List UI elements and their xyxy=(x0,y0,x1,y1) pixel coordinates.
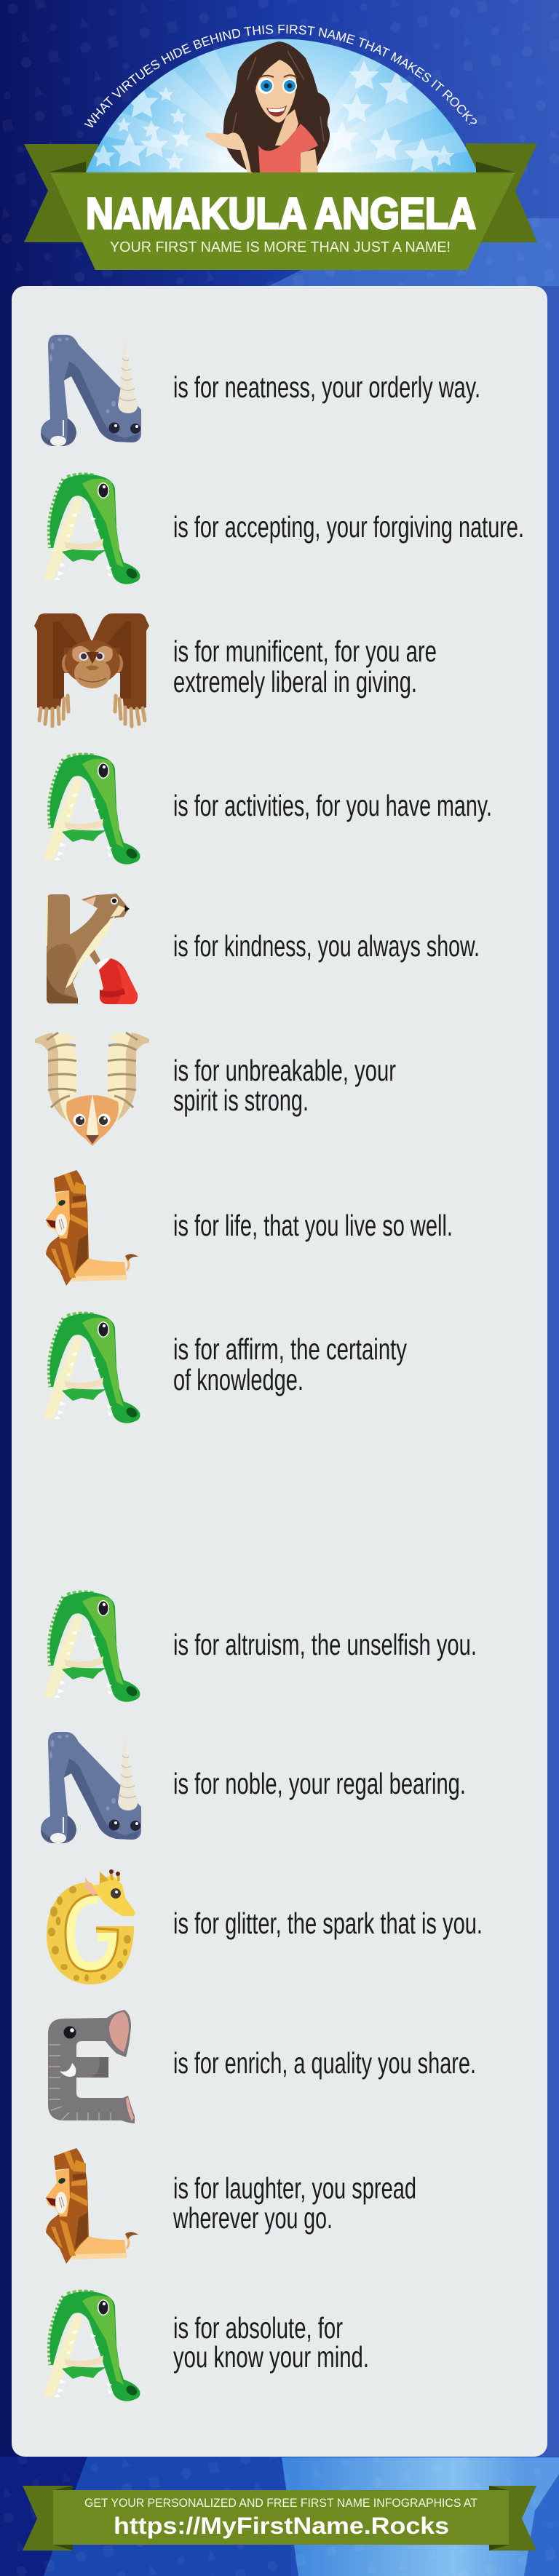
footer ribbon tails xyxy=(23,2486,536,2551)
text: A affirm lines: of knowledge. xyxy=(173,1363,304,1396)
row: G glitter xyxy=(47,1869,483,1984)
icon: crocodile letter A xyxy=(44,754,140,864)
icon: giraffe letter G xyxy=(47,1869,135,1984)
header: curved tagline: WHAT VIRTUES HIDE BEHIND THIS FIRST NAME THAT MAKES IT ROCK? xyxy=(84,25,477,128)
text: A absolute lines: is for absolute, for xyxy=(173,2311,343,2345)
row: U unbreakable xyxy=(35,1033,396,1146)
text: U lines: spirit is strong. xyxy=(173,1084,309,1117)
row: A affirm xyxy=(44,1313,407,1423)
row: A absolute xyxy=(44,2291,369,2401)
icon: crocodile letter A xyxy=(44,2291,140,2401)
icon: crocodile letter A xyxy=(44,474,140,584)
icon: narwhal letter N xyxy=(41,335,141,446)
icon: lion letter L xyxy=(46,1170,138,1286)
text: M munificent lines xyxy=(173,635,437,699)
row: N neatness xyxy=(41,335,480,446)
icon: narwhal letter N xyxy=(41,1732,141,1843)
row: E enrich xyxy=(48,2010,476,2123)
footer ribbon main panel xyxy=(53,2490,509,2545)
icon: kangaroo letter K xyxy=(47,894,138,1004)
text: A absolute lines: you know your mind. xyxy=(173,2340,369,2374)
row: A activities xyxy=(44,754,492,864)
text: U lines: is for unbreakable, your xyxy=(173,1054,396,1087)
text: L laughter lines: is for laughter, you spread xyxy=(173,2171,416,2205)
row: A altruism xyxy=(44,1591,477,1702)
header: cartoon woman xyxy=(205,41,330,172)
row: M munificent xyxy=(34,613,437,726)
icon: crocodile letter A xyxy=(44,1591,140,1702)
row: N noble xyxy=(41,1732,466,1843)
icon: monkey letter M xyxy=(34,613,149,726)
text: U lines xyxy=(173,1054,396,1117)
subtitle: YOUR FIRST NAME IS MORE THAN JUST A NAME! xyxy=(110,239,451,255)
text: M munificent lines: extremely liberal in giving. xyxy=(173,665,417,699)
footer url: https://MyFirstName.Rocks xyxy=(114,2513,449,2539)
icon: ram letter U xyxy=(35,1033,149,1146)
text: M munificent lines: is for munificent, for you are xyxy=(173,635,437,668)
text: A absolute lines xyxy=(173,2311,369,2374)
header: ribbon main panel xyxy=(50,172,515,270)
icon: crocodile letter A xyxy=(44,1313,140,1423)
header: ribbon folds xyxy=(48,162,515,172)
icon: elephant letter E xyxy=(48,2010,135,2123)
row: K kindness xyxy=(47,894,480,1004)
footer ribbon xyxy=(23,2486,536,2551)
icon: lion letter L xyxy=(46,2148,138,2264)
row: A accepting xyxy=(44,474,524,584)
name title: NAMAKULA ANGELA xyxy=(86,189,476,238)
header: sky dome with stars xyxy=(86,39,476,172)
text: A affirm lines: is for affirm, the certainty xyxy=(173,1332,407,1366)
row: L laughter xyxy=(46,2148,416,2264)
header: ribbon tails xyxy=(24,143,537,242)
text: L life line: is for life, that you live so well. xyxy=(173,1209,453,1242)
text: L laughter lines xyxy=(173,2171,416,2235)
footer call to action: GET YOUR PERSONALIZED AND FREE FIRST NAME INFOGRAPHICS AT xyxy=(84,2496,477,2510)
text: L laughter lines: wherever you go. xyxy=(173,2201,333,2235)
row: L life xyxy=(46,1170,453,1286)
text: A affirm lines xyxy=(173,1332,407,1396)
